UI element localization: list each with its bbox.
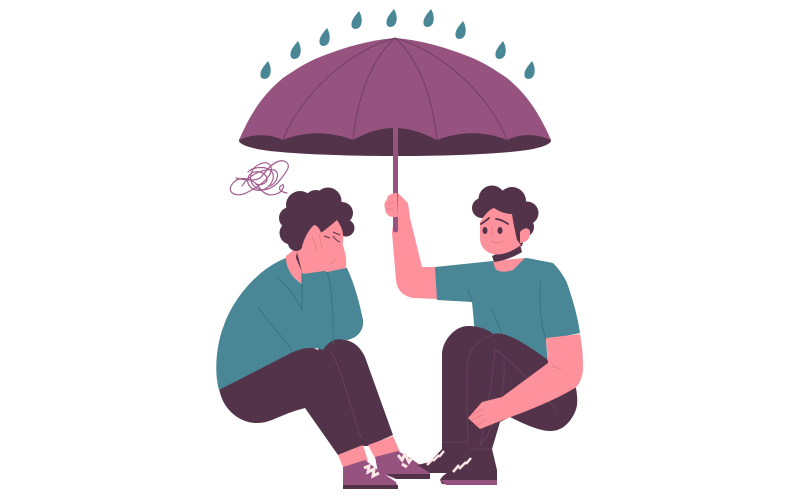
left person neck	[286, 245, 312, 284]
umbrella handle	[393, 128, 398, 230]
right person back shoe	[417, 449, 480, 473]
right person sole and laces	[440, 458, 497, 485]
right person shirt	[435, 258, 580, 366]
right person face	[480, 208, 521, 255]
right person ear	[520, 228, 530, 243]
person right	[384, 128, 583, 485]
right person fingers	[384, 193, 398, 217]
left person face	[316, 220, 343, 268]
rain drops	[260, 9, 535, 79]
right person back leg	[442, 326, 495, 452]
left person hands	[302, 225, 346, 274]
left person front leg	[219, 347, 363, 455]
right person hair	[472, 186, 538, 246]
left person hair	[279, 188, 354, 251]
left person back sock	[368, 436, 400, 458]
left person front shoe	[343, 460, 398, 489]
right person facial features	[481, 218, 508, 243]
right person neck and collar	[492, 244, 525, 272]
right person thigh and front leg	[440, 334, 577, 484]
person left	[216, 188, 430, 489]
left person back shoe	[375, 451, 430, 479]
scribble of worried thoughts	[230, 161, 288, 195]
left person sweater	[216, 258, 363, 390]
umbrella	[239, 38, 551, 156]
left person front sock	[338, 445, 368, 467]
right person raised arm	[392, 193, 437, 299]
right person arm around knee	[468, 334, 583, 429]
left person back leg	[318, 339, 393, 446]
